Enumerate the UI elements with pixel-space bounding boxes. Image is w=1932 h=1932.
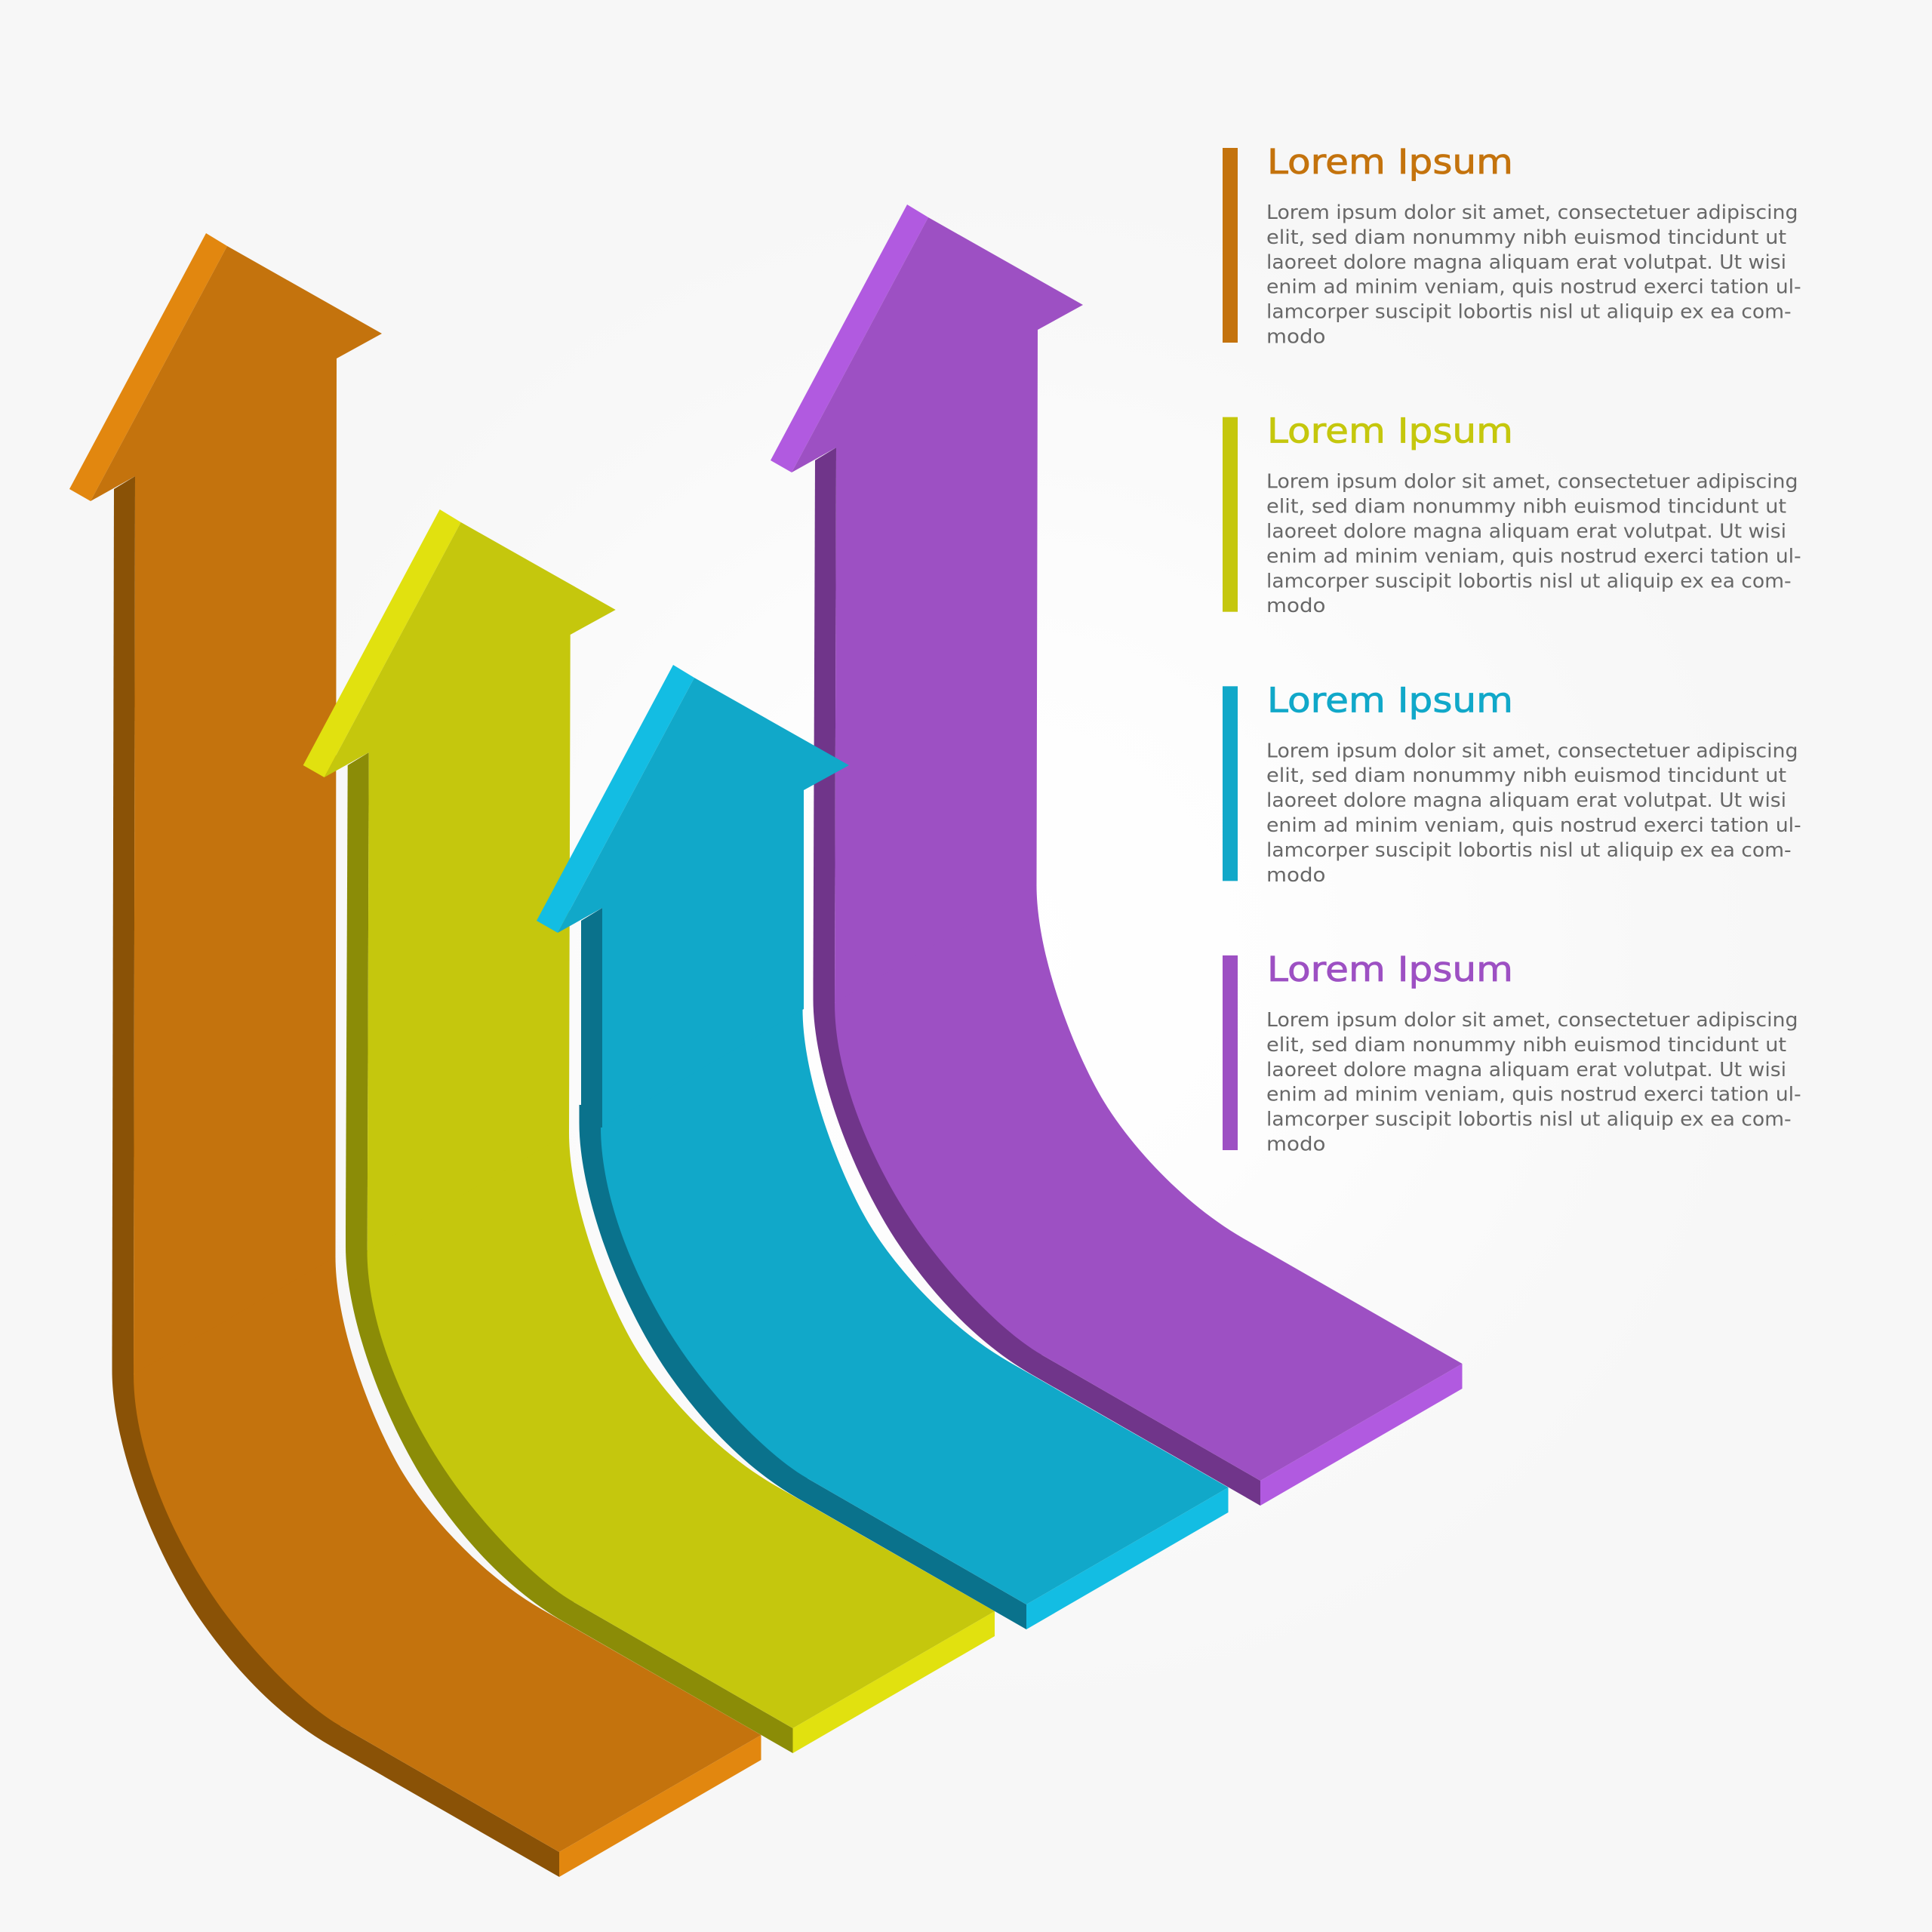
purple body text: lamcorper suscipit lobortis nisl ut aliquip ex ea com- xyxy=(1266,1109,1792,1131)
cyan lower body xyxy=(580,1009,1229,1629)
yellow body text: elit, sed diam nonummy nibh euismod tincidunt ut xyxy=(1266,496,1786,518)
orange lower body xyxy=(112,1257,761,1877)
purple body text: laoreet dolore magna aliquam erat volutpat. Ut wisi xyxy=(1266,1059,1786,1081)
legend item: cyan xyxy=(1223,680,1801,887)
purple curved face xyxy=(835,885,1463,1481)
yellow body text: modo xyxy=(1266,595,1325,617)
cyan body text: laoreet dolore magna aliquam erat volutpat. Ut wisi xyxy=(1266,789,1786,812)
cyan body text: modo xyxy=(1266,864,1325,887)
orange body text: enim ad minim veniam, quis nostrud exerci tation ul- xyxy=(1266,276,1801,299)
orange body text: lamcorper suscipit lobortis nisl ut aliquip ex ea com- xyxy=(1266,301,1792,324)
yellow body text: laoreet dolore magna aliquam erat volutpat. Ut wisi xyxy=(1266,520,1786,543)
cyan body text: lamcorper suscipit lobortis nisl ut aliquip ex ea com- xyxy=(1266,839,1792,862)
purple end cap xyxy=(1260,1364,1463,1506)
orange heading: Lorem Ipsum xyxy=(1267,142,1513,182)
cyan heading: Lorem Ipsum xyxy=(1267,680,1513,720)
purple body text: modo xyxy=(1266,1134,1325,1156)
yellow body text: lamcorper suscipit lobortis nisl ut aliquip ex ea com- xyxy=(1266,570,1792,592)
yellow body text: enim ad minim veniam, quis nostrud exerci tation ul- xyxy=(1266,545,1801,568)
arrow: yellow xyxy=(303,509,995,1753)
purple body text xyxy=(1266,1009,1801,1156)
cyan body text: elit, sed diam nonummy nibh euismod tincidunt ut xyxy=(1266,764,1786,787)
yellow heading: Lorem Ipsum xyxy=(1267,411,1513,451)
purple lower side wall xyxy=(814,981,1260,1506)
yellow lower body xyxy=(346,1133,995,1753)
orange body text: elit, sed diam nonummy nibh euismod tincidunt ut xyxy=(1266,226,1786,249)
purple body text: enim ad minim veniam, quis nostrud exerci tation ul- xyxy=(1266,1084,1801,1106)
purple body text: Lorem ipsum dolor sit amet, consectetuer adipiscing xyxy=(1266,1009,1798,1032)
orange body text: modo xyxy=(1266,326,1325,349)
orange body text: laoreet dolore magna aliquam erat volutpat. Ut wisi xyxy=(1266,251,1786,274)
purple arrow head and shaft xyxy=(771,205,1083,1004)
cyan body text: Lorem ipsum dolor sit amet, consectetuer adipiscing xyxy=(1266,740,1798,762)
orange body text: Lorem ipsum dolor sit amet, consectetuer adipiscing xyxy=(1266,202,1798,224)
cyan body text: enim ad minim veniam, quis nostrud exerci tation ul- xyxy=(1266,814,1801,837)
yellow body text: Lorem ipsum dolor sit amet, consectetuer adipiscing xyxy=(1266,471,1798,494)
yellow arrow head and shaft xyxy=(303,509,616,1251)
purple colour bar xyxy=(1223,955,1238,1150)
yellow colour bar xyxy=(1223,417,1238,612)
orange body text xyxy=(1266,202,1801,349)
orange colour bar xyxy=(1223,148,1238,343)
arrow: purple xyxy=(771,205,1463,1506)
orange arrow head and shaft xyxy=(69,233,382,1375)
cyan arrow head and shaft xyxy=(537,665,849,1128)
arrow: orange xyxy=(69,233,761,1877)
cyan colour bar xyxy=(1223,686,1238,881)
purple body text: elit, sed diam nonummy nibh euismod tincidunt ut xyxy=(1266,1034,1786,1057)
yellow body text xyxy=(1266,471,1801,617)
arrow: cyan xyxy=(537,665,1229,1629)
purple heading: Lorem Ipsum xyxy=(1267,949,1513,989)
cyan body text xyxy=(1266,740,1801,887)
legend item: yellow xyxy=(1223,411,1801,617)
legend item: orange xyxy=(1223,142,1801,349)
legend item: purple xyxy=(1223,949,1801,1156)
